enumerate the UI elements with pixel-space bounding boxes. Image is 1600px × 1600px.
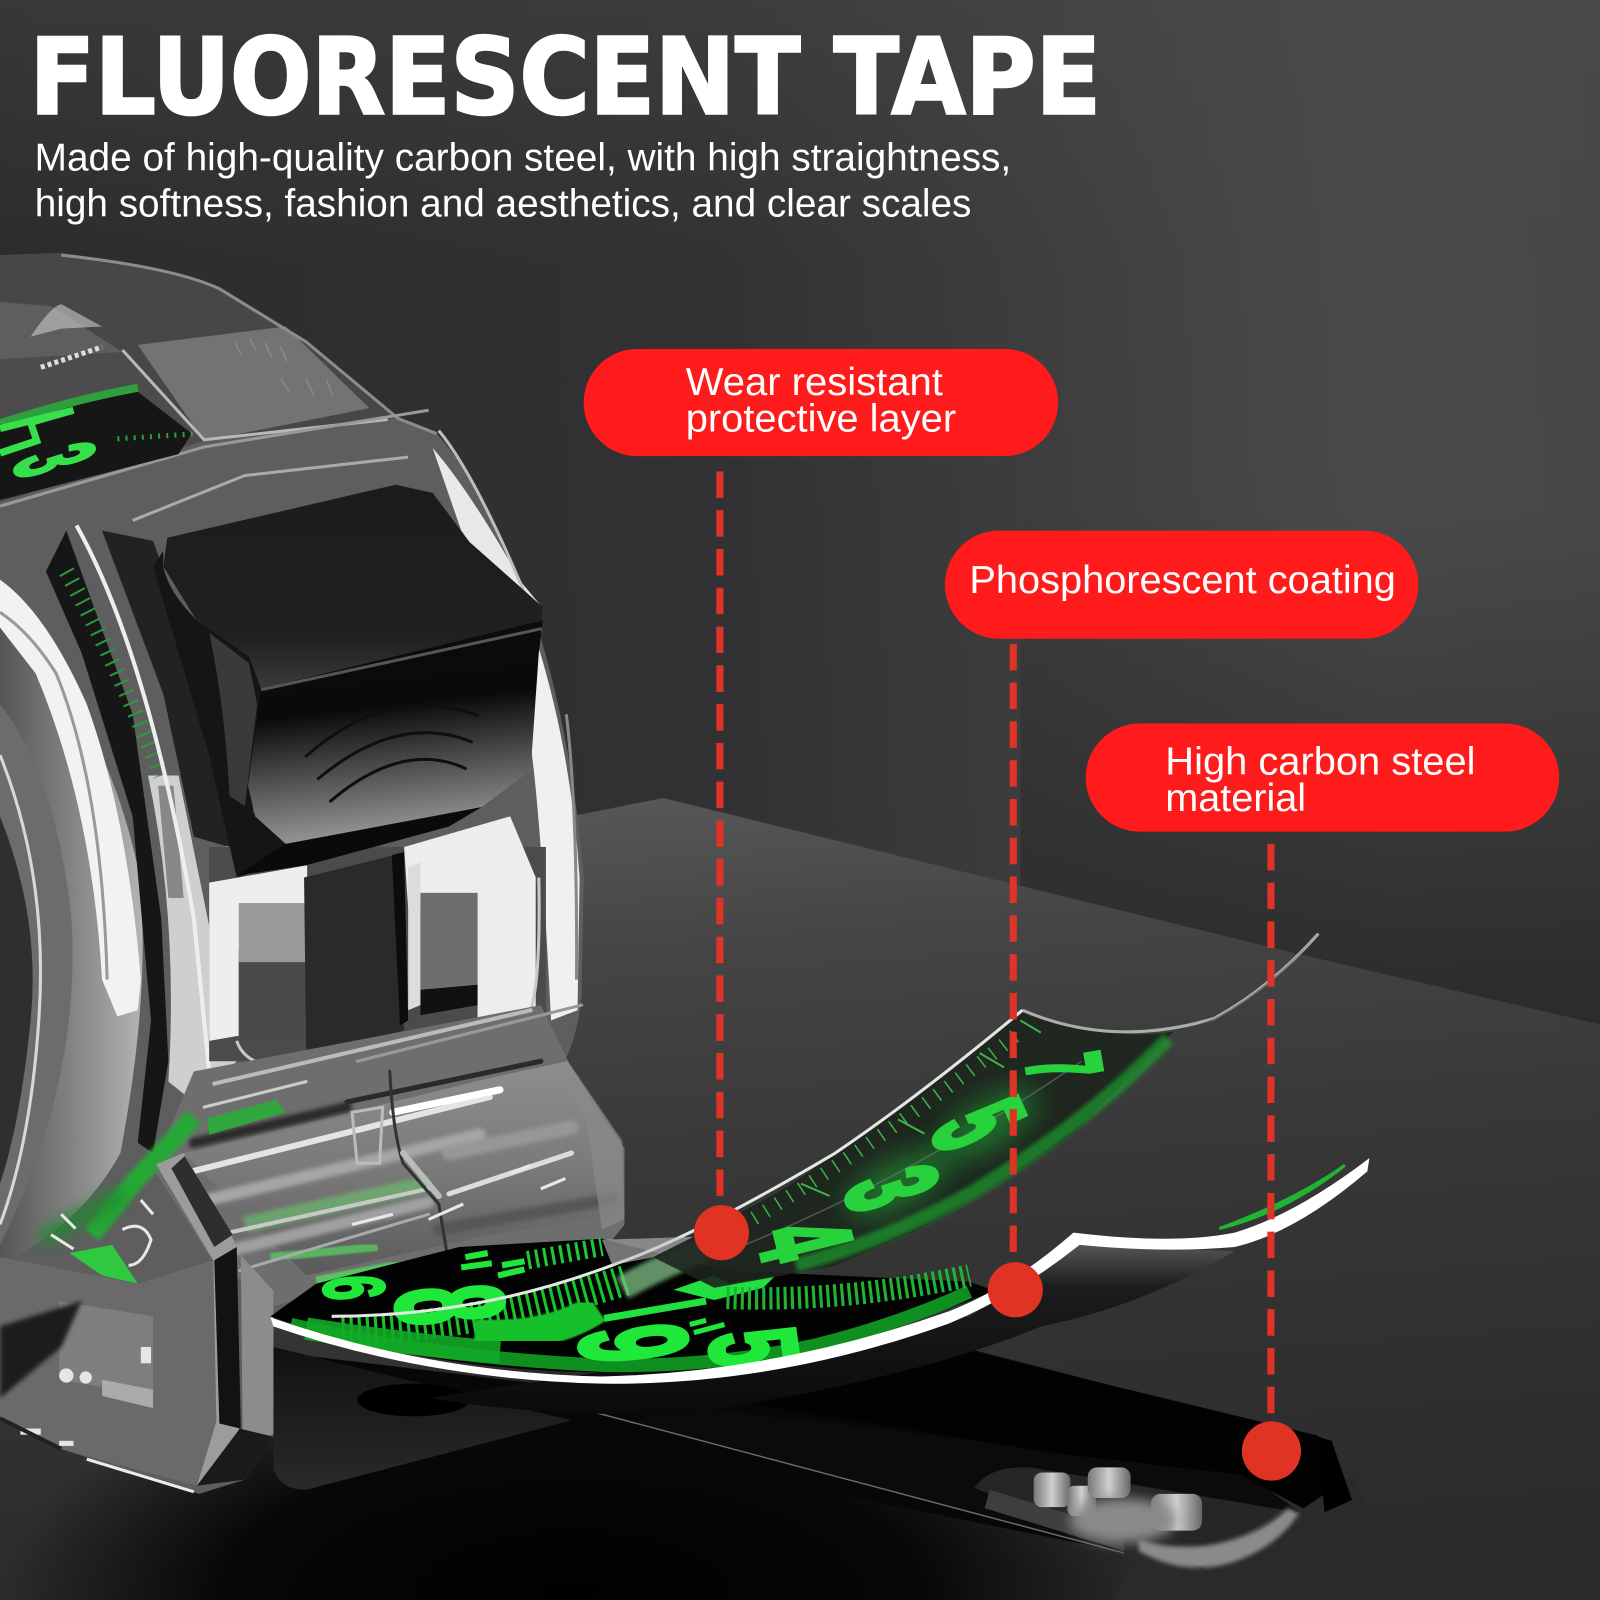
white tape edge [270,1158,1369,1384]
hook lower body [1114,1476,1398,1600]
shadow beneath tape [429,1245,1235,1414]
white bands [0,580,141,1016]
tape face [270,1239,995,1372]
window edges [0,350,429,520]
hook plate [974,1467,1286,1566]
dashed leader lines [720,471,1271,1423]
upper top panel [0,253,398,441]
upper transparent protective layer: 7 [1005,1046,1124,1089]
green reflection in housing [41,1100,429,1284]
lower tape blade [270,1158,1369,1414]
blade box under housing [273,1347,571,1490]
side gray between rails [102,531,230,847]
rivets [1034,1467,1202,1543]
callout: phosphorescent coating [945,531,1418,639]
transparent case silhouette [0,253,624,1494]
film edges [1022,934,1318,1032]
far-side ticks [727,1276,969,1299]
marker dots [694,1205,1301,1481]
ornate glints [51,1165,565,1265]
dense ticks under film edge [342,1280,628,1331]
top tick marks [754,1029,1024,1218]
green blotches [474,1308,597,1335]
dark rim [46,531,168,1153]
window under button [209,816,546,1067]
button stem [304,855,404,1053]
grip arcs [306,706,478,801]
green sliver on far tape [1219,1165,1345,1229]
lower tape blade: 9 [547,1317,720,1370]
chamfer column [156,1153,239,1486]
callout: phosphorescent coating: Phosphorescent coating [969,559,1396,602]
band under button [148,776,237,1102]
subtitle [35,136,1011,225]
green rim along the tape edge [291,1292,969,1365]
callout: wear resistant protective layer: Wear resistant [686,361,943,404]
lower housing [153,1005,624,1306]
subtitle: Made of high-quality carbon steel, with high straightness, [35,136,1011,179]
callout: high carbon steel material: High carbon steel [1165,740,1476,783]
lower green scale [796,1039,1168,1265]
left disc [0,612,143,1265]
callout: wear resistant protective layer: protective layer [686,398,956,441]
green side scale [66,571,161,776]
lower tape blade: 5 [683,1320,825,1374]
embossed marks on top [235,339,333,396]
soft housing reflections [194,1107,612,1253]
lower-left block [0,1257,216,1486]
slide lock button [153,485,543,878]
button side [153,551,306,878]
rods and rails [184,1005,582,1270]
title: FLUORESCENT TAPE [30,15,1101,138]
tape numerals: 8 [364,1278,536,1331]
tape numerals: 4 [730,1207,879,1274]
subtitle: high softness, fashion and aesthetics, and clear scales [35,182,971,225]
tape measure body [0,253,624,1494]
upper transparent protective layer: 3 [817,1151,965,1226]
upper transparent protective layer: 5 [904,1081,1052,1168]
lower tape blade: 6 [305,1273,401,1303]
tape seen through top window [0,388,199,500]
tape hook and blade end [571,1351,1398,1600]
green glows [837,1137,959,1230]
table surface [0,798,1600,1600]
callout: high carbon steel material: material [1165,777,1306,820]
case rim highlight [61,255,437,434]
button front [248,620,543,844]
callout: wear resistant protective layer [584,349,1058,456]
callout: high carbon steel material [1086,723,1559,832]
button top [163,485,543,689]
right highlight [433,448,543,608]
shadow under tape blade [276,1349,1327,1556]
upper transparent protective layer [332,934,1318,1316]
